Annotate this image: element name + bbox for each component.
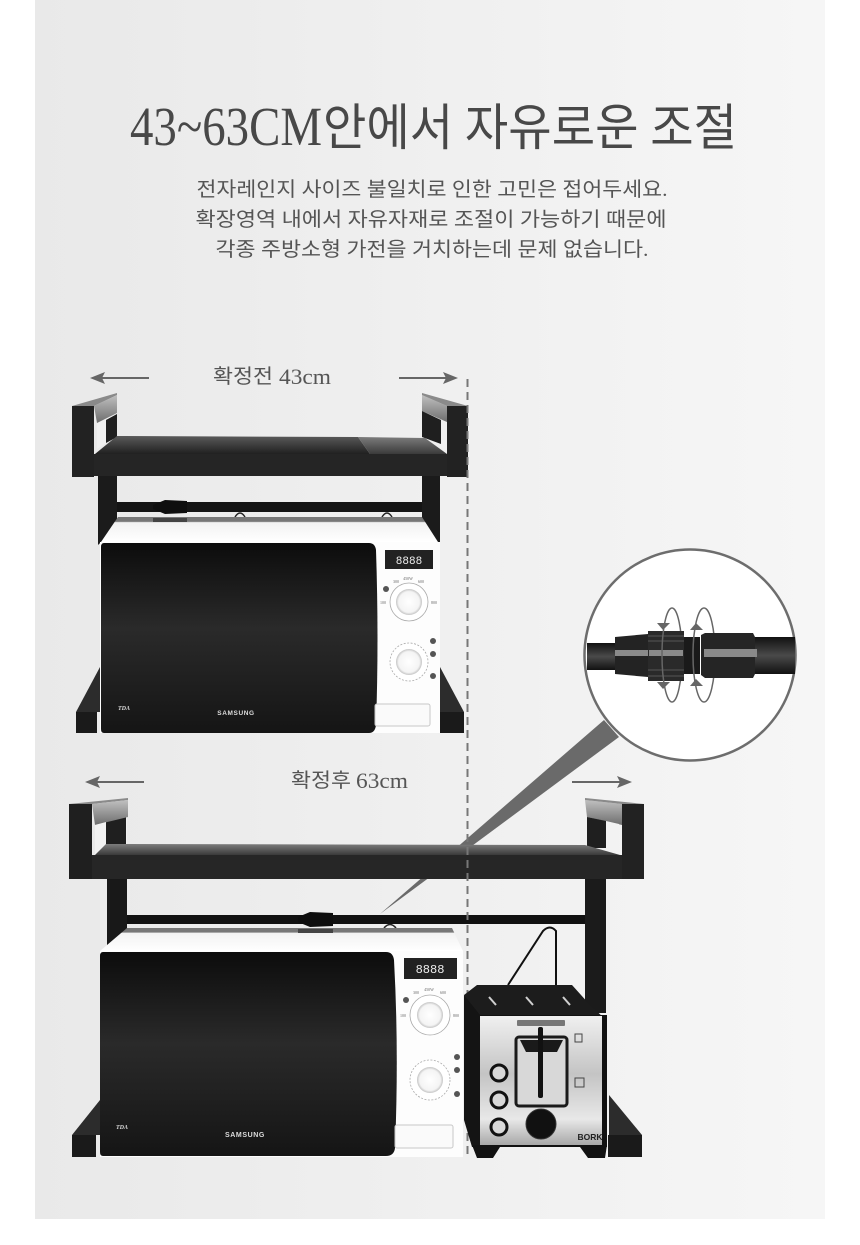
- toaster base: [472, 1145, 607, 1158]
- browning knob: [526, 1109, 556, 1139]
- left foot: [76, 667, 100, 733]
- right collar: [701, 633, 755, 678]
- shelf top surface: [95, 436, 370, 454]
- right end block: [622, 804, 644, 879]
- left rear leg: [98, 476, 117, 545]
- label: after: 확정후: [291, 769, 351, 792]
- label: after: 63cm: [356, 768, 408, 793]
- timer dial: [410, 1060, 450, 1100]
- dial markings: 800: [431, 600, 437, 605]
- panel icons: [403, 997, 460, 1097]
- shelf front: [94, 454, 447, 476]
- dial markings: 300: [413, 990, 419, 995]
- right foot: [440, 667, 464, 733]
- right foot: [608, 1095, 642, 1157]
- left foot: [72, 1100, 100, 1157]
- dial markings: 600: [440, 990, 446, 995]
- arrow: before right: [399, 372, 458, 384]
- threaded section: [684, 637, 700, 674]
- hooks: [235, 513, 392, 517]
- rod connector: [298, 912, 333, 927]
- magnified circle: [584, 550, 796, 760]
- arrow: before left: [90, 372, 149, 384]
- left handle: [72, 393, 117, 449]
- front rotation arcs: [662, 608, 704, 702]
- power dial: [410, 995, 450, 1035]
- rotation arrowheads: [657, 623, 703, 689]
- label: before: 43cm: [279, 364, 331, 389]
- buttons: [491, 1065, 507, 1135]
- brand: SAMSUNG: [225, 1132, 265, 1139]
- right rear leg: [422, 476, 440, 545]
- left end block: [72, 406, 94, 477]
- left rear leg: [107, 879, 127, 946]
- right handle: [422, 393, 468, 449]
- button panel: [395, 1125, 453, 1148]
- callout wedge: [380, 720, 619, 914]
- right end block: [447, 406, 468, 477]
- right rod: [755, 637, 795, 674]
- dial markings: 450W: [424, 987, 434, 992]
- shelf top surface: [95, 844, 620, 855]
- toaster left side: [464, 995, 480, 1147]
- shelf front: [92, 855, 622, 879]
- display: 8888: [416, 963, 444, 977]
- side icons: [575, 1034, 584, 1087]
- description text: 전자레인지 사이즈 불일치로 인한 고민은 접어두세요.: [196, 178, 668, 201]
- display: 8888: [396, 556, 422, 568]
- telescopic rod: [117, 502, 422, 512]
- door logo: TDA: [118, 706, 130, 712]
- description text: [196, 178, 668, 261]
- panel icons: [383, 586, 436, 679]
- guide dashed line: [466, 379, 468, 1158]
- top vent: [517, 1020, 565, 1026]
- right rear leg: [585, 878, 606, 1013]
- left sleeve: [615, 634, 648, 677]
- toaster front: [480, 1015, 607, 1147]
- left rod: [587, 643, 615, 670]
- label: before: [213, 364, 331, 389]
- left handle: [69, 798, 128, 855]
- dial markings: [380, 576, 437, 605]
- title: 43~63CM: [130, 96, 322, 157]
- right handle: [585, 798, 644, 850]
- power dial: [390, 583, 428, 621]
- toast lever guide: [520, 1040, 563, 1052]
- telescopic rod: [127, 915, 585, 924]
- dial markings: 450W: [403, 576, 413, 581]
- brand label: BORK: [577, 1132, 603, 1142]
- brand: SAMSUNG: [217, 710, 255, 717]
- knurled nut: [648, 631, 684, 681]
- dial markings: 800: [453, 1013, 459, 1018]
- hook: [384, 924, 396, 928]
- door logo: TDA: [116, 1125, 128, 1131]
- label: after: [291, 768, 408, 793]
- description text: 각종 주방소형 가전을 거치하는데 문제 없습니다.: [216, 238, 648, 261]
- dial markings: [400, 987, 459, 1018]
- toaster: [464, 928, 607, 1158]
- highlight strip: [615, 649, 757, 657]
- description text: 확장영역 내에서 자유자재로 조절이 가능하기 때문에: [196, 208, 666, 231]
- rack before extension: 43cm: [72, 393, 468, 733]
- toaster top: [464, 985, 604, 1018]
- rear rotation arcs: [672, 608, 715, 702]
- dial markings: 100: [400, 1013, 406, 1018]
- display: [385, 550, 433, 569]
- microwave: [100, 928, 463, 1157]
- microwave: [100, 517, 440, 733]
- rod connector: [153, 500, 187, 514]
- display: [404, 958, 457, 979]
- left end block: [69, 804, 92, 879]
- label: before: 확정전: [213, 365, 273, 388]
- button panel: [375, 704, 430, 726]
- title: 안에서 자유로운 조절: [323, 100, 737, 156]
- power cord: [508, 928, 556, 990]
- rack after extension: 63cm: [69, 798, 644, 1157]
- toast window: [516, 1037, 567, 1106]
- title: [130, 96, 737, 157]
- arrow: after left: [85, 776, 144, 788]
- dial markings: 600: [418, 579, 424, 584]
- arrow: after right: [572, 776, 632, 788]
- lever slot: [538, 1027, 543, 1098]
- dial markings: 100: [380, 600, 386, 605]
- dial markings: 300: [393, 579, 399, 584]
- timer dial: [390, 643, 428, 681]
- toaster slots: [489, 997, 570, 1005]
